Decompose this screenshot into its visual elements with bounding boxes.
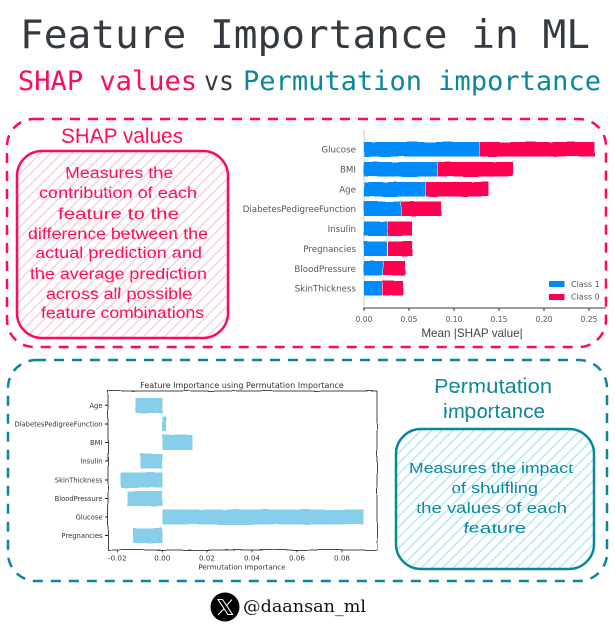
x ticks: [117, 550, 342, 552]
card text: actual prediction and: [35, 245, 202, 262]
x tick labels: -0.02: [108, 554, 127, 562]
card text: the values of each: [416, 500, 567, 517]
bar chart: mean SHAP value: [243, 130, 606, 340]
heading: Permutation importance: Permutation: [434, 376, 552, 398]
definition card: Permutation: [396, 429, 594, 569]
x axis: 0.25: [581, 315, 598, 324]
panel border: Permutation: [8, 360, 607, 581]
y ticks: [105, 405, 108, 536]
card text: feature combinations: [41, 305, 204, 322]
bars: [120, 398, 364, 543]
card text: [409, 460, 574, 537]
heading: Permutation importance: [434, 376, 552, 423]
stacked bars: [364, 142, 595, 296]
x axis: 0.10: [446, 315, 463, 324]
footer handle: [210, 592, 366, 622]
x tick labels: 0.08: [334, 554, 350, 562]
bar chart: permutation importance: [14, 381, 377, 572]
legend: Class 1: [571, 280, 600, 289]
x tick labels: 0.00: [154, 554, 171, 562]
y labels: BMI: [90, 439, 103, 447]
y labels: Age: [89, 402, 102, 410]
y labels: Insulin: [80, 458, 102, 466]
heading: SHAP values: SHAP values: [61, 125, 183, 148]
subtitle: vs: vs: [204, 66, 234, 97]
card box: [396, 429, 594, 569]
feature labels: BMI: [340, 166, 356, 176]
x axis: [356, 308, 606, 324]
y labels: BloodPressure: [55, 495, 102, 503]
card text: across all possible: [46, 286, 192, 303]
card text: feature to the: [58, 206, 179, 223]
panel border: SHAP: [7, 119, 606, 347]
chart title: Feature Importance using Permutation Importance: [140, 381, 344, 390]
legend: Class 0: [571, 292, 600, 302]
plot frame: [108, 391, 377, 550]
subtitle: Permutation importance: Permutation importance: [243, 66, 601, 97]
subtitle: SHAP values: SHAP values: [18, 66, 197, 97]
panel: SHAP values: [7, 119, 606, 347]
card text: Measures the: [65, 165, 173, 182]
panel: Permutation importance: [8, 360, 607, 581]
card box: [17, 151, 228, 338]
title: Feature Importance in ML: [20, 13, 590, 58]
card text: of shuffling: [451, 480, 538, 497]
x axis: 0.20: [536, 315, 553, 324]
subtitle: [18, 66, 601, 97]
x tick labels: 0.06: [289, 554, 305, 562]
icon: X logo: [210, 592, 240, 622]
feature labels: DiabetesPedigreeFunction: [243, 205, 356, 215]
feature labels: Insulin: [328, 225, 356, 235]
card text: the average prediction: [30, 266, 207, 283]
feature labels: SkinThickness: [295, 284, 356, 294]
y labels: Glucose: [76, 514, 102, 522]
y labels: Pregnancies: [62, 532, 103, 540]
x tick labels: 0.02: [199, 554, 215, 562]
x axis label: Permutation Importance: [198, 562, 286, 572]
x tick labels: [108, 554, 350, 562]
y labels: [14, 402, 103, 540]
x axis: 0.00: [356, 315, 373, 324]
x tick labels: 0.04: [244, 554, 260, 562]
legend: [549, 280, 600, 302]
x axis: 0.15: [491, 315, 508, 324]
y labels: SkinThickness: [55, 476, 103, 484]
handle text: @daansan_ml: [243, 597, 366, 617]
card text: Measures the impact: [409, 460, 574, 477]
x axis: 0.05: [401, 315, 418, 324]
card text: feature: [463, 520, 526, 537]
heading: Permutation importance: importance: [443, 401, 545, 423]
y axis line: [363, 130, 365, 306]
card text: [28, 165, 208, 322]
feature labels: Glucose: [321, 146, 356, 156]
feature labels: Pregnancies: [303, 245, 356, 255]
x axis label: Mean |SHAP value|: [421, 327, 523, 340]
y labels: DiabetesPedigreeFunction: [14, 420, 102, 428]
feature labels: BloodPressure: [294, 265, 356, 275]
card text: difference between the: [28, 226, 208, 243]
feature labels: Age: [339, 186, 356, 196]
feature labels: [243, 146, 356, 294]
definition card: SHAP: [17, 151, 228, 338]
card text: contribution of each: [39, 185, 197, 202]
